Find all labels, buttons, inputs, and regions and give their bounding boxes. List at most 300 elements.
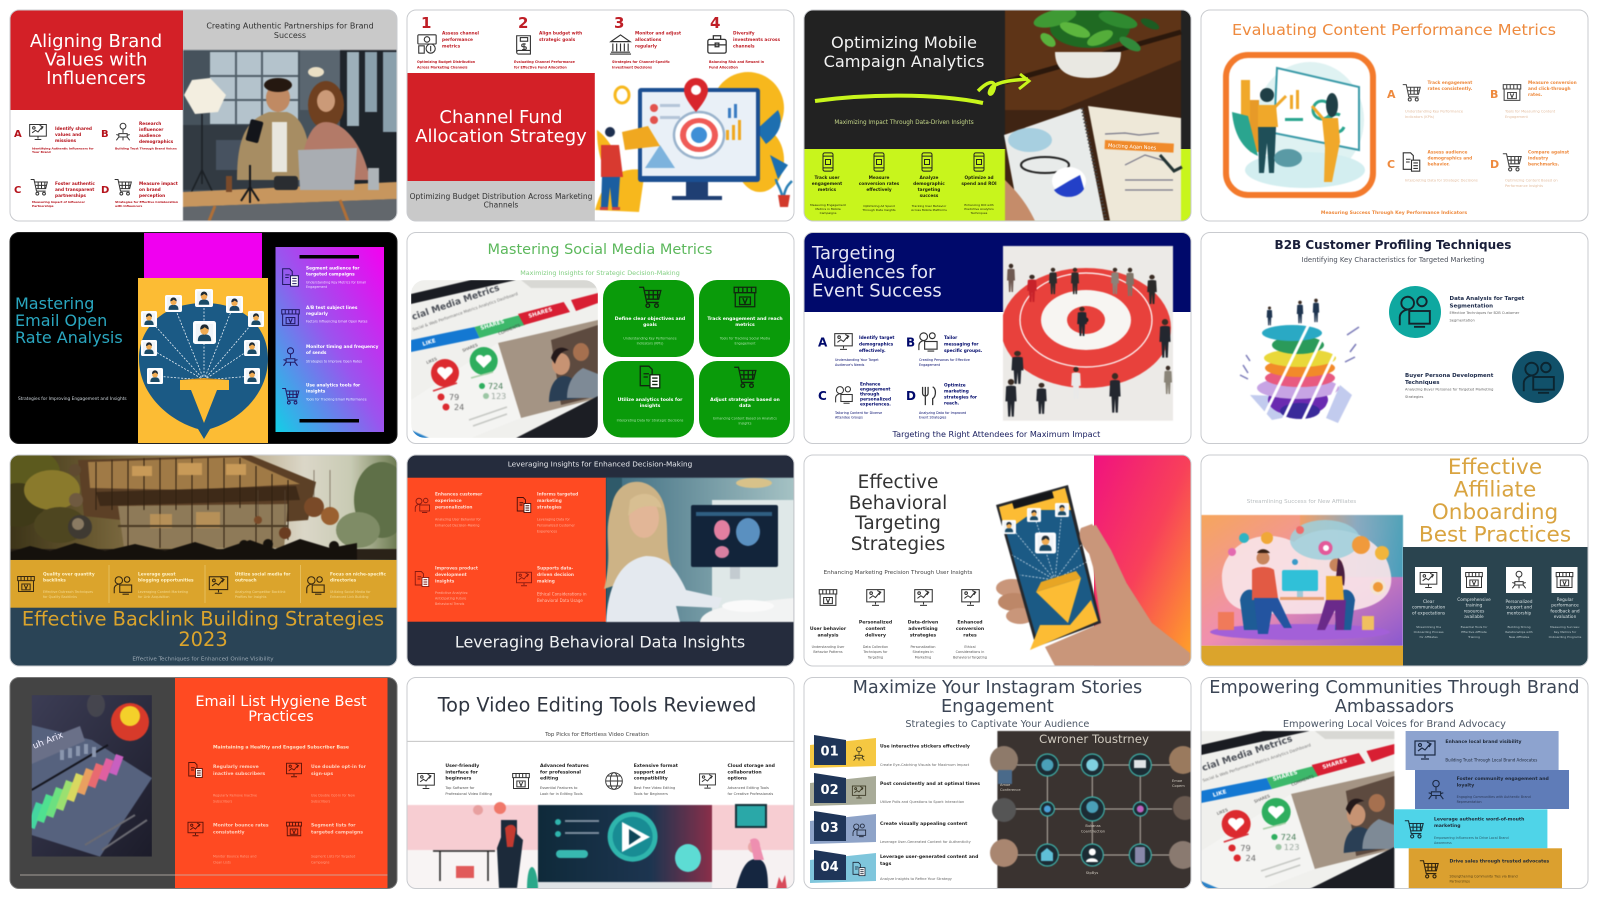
item: niche directories: Focus on niche-specific: [330, 572, 386, 578]
card: foster community engagement: Foster community engagement and: [1457, 776, 1549, 782]
heading: Practices: [248, 709, 314, 725]
photo caption and node labels: [1000, 732, 1185, 875]
item: data-driven advertising: Strategies in: [913, 650, 933, 654]
item: buyer persona development: Strategies: [1405, 395, 1423, 399]
item: regular performance feedback: Regular: [1557, 597, 1573, 603]
subtitle panel: grey band: Channels: [484, 200, 518, 210]
item: cloud storage: collaboration: [728, 770, 762, 776]
item: advanced features: Advanced features: [540, 763, 589, 769]
item A: [14, 124, 94, 154]
item C: personalized: [860, 396, 891, 402]
panel: Email List Hygiene Best Practices: [10, 678, 397, 888]
item: comprehensive training: resources: [1464, 609, 1485, 615]
card: track engagement: metrics: [735, 322, 755, 328]
item: measure conversion: [859, 153, 900, 212]
item: data analysis for target segmentation: Data Analysis for Target: [1450, 296, 1525, 302]
item 3: Strategies for Channel-Specific: [612, 60, 670, 64]
heading: Best Practices: [1419, 523, 1571, 548]
item: comprehensive training: Essential Tools for: [1461, 625, 1488, 629]
item: monitor timing: Monitor timing and frequency: [306, 344, 379, 350]
item: remove inactive subscribers: Regularly Remove Inactive: [213, 794, 257, 798]
item: segment audience: Understanding Key Metrics for Email: [306, 280, 366, 284]
item: monitor timing: Strategies to Improve Open Rates: [306, 360, 362, 364]
item C: C: [818, 389, 827, 403]
item: advanced features: Look for in Editing Tools: [540, 792, 583, 796]
item: cloud storage: options: [728, 776, 747, 782]
item C: Attendee Groups: [835, 416, 863, 420]
item: extensive format: Tools for Beginners: [633, 792, 668, 796]
card: define objectives: goals: [643, 322, 657, 328]
heading: [15, 294, 123, 347]
heading: Targeting: [854, 513, 941, 534]
item B: Creating Personas for Effective: [919, 358, 970, 362]
subtitle panel: grey band: [407, 181, 595, 221]
item: advanced features: Essential Features to: [540, 786, 577, 790]
item 2: strategic goals: [539, 37, 576, 43]
item: regular performance feedback: [1549, 567, 1582, 639]
item 1: [417, 14, 480, 70]
item C: behavior.: [1428, 162, 1450, 168]
item: analyze demographic: demographic: [913, 181, 945, 187]
stats band: four strategies: [10, 560, 397, 608]
item D: strategies for: [944, 394, 978, 400]
heading: Email List Hygiene Best: [195, 694, 367, 710]
item 1: 1: [421, 14, 431, 32]
orange panel: [407, 478, 606, 622]
item 03: Create visually appealing content: [880, 821, 968, 827]
item: measure conversion: conversion rates: [859, 181, 900, 187]
item D: D: [1490, 158, 1499, 171]
item: data-driven advertising: advertising: [908, 626, 938, 632]
item A: rates consistently.: [1428, 86, 1473, 92]
item B: rates.: [1528, 92, 1543, 98]
item B: [101, 121, 177, 150]
heading: Empowering Communities Through Brand: [1209, 678, 1580, 698]
item 2: 2: [518, 14, 528, 32]
item: clear communication: for Affiliates: [1420, 635, 1438, 639]
item B: B: [1490, 88, 1498, 101]
item: segment audience: [283, 266, 366, 289]
item: track user engagement: [810, 153, 847, 215]
item: social media: [209, 572, 291, 599]
item: monitor timing: of sends: [306, 350, 327, 356]
item: personalized support: Building Strong: [1507, 625, 1531, 629]
item: personalized content delivery: Targeting: [867, 656, 883, 660]
photo caption and node labels: Copem: [1172, 784, 1185, 788]
item A: [1387, 80, 1473, 119]
item: a/b test: A/B test subject lines: [306, 305, 358, 311]
item C: experiences.: [860, 402, 891, 408]
item: quality backlinks: for Quality Backlinks: [43, 595, 77, 599]
panel: Empowering Communities Through Brand Ambassadors: [1201, 678, 1588, 889]
item: enhances customer experience: personalization: [435, 505, 472, 511]
gradient strategy panel: [276, 247, 384, 432]
item C: Tailoring Content for Diverse: [834, 411, 882, 415]
item 3: regularly: [635, 44, 657, 50]
item 03: [810, 811, 972, 844]
item: personalized content delivery: Personalized: [859, 620, 892, 626]
top caption: Leveraging Insights for Enhanced Decision-Making: [508, 460, 692, 469]
item 01: [810, 735, 970, 768]
heading: Onboarding: [1432, 500, 1558, 525]
card: foster community engagement: [1415, 770, 1569, 809]
card: leverage word-of-mouth: marketing: [1434, 823, 1461, 829]
item: personalized content delivery: [859, 590, 892, 660]
card: track engagement: Engagement: [734, 342, 756, 346]
item C: Measuring Impact of Influencer: [32, 200, 85, 204]
item A: Audience's Needs: [835, 363, 865, 367]
item C: partnerships: [55, 193, 86, 199]
item 01: Use interactive stickers effectively: [880, 744, 970, 750]
heading panel: red title block: [10, 10, 183, 110]
subtitle panel: grey band: Optimizing Budget Distribution Across Marketing: [410, 192, 593, 201]
heading panel: red title block: Aligning Brand: [30, 31, 162, 52]
card: leverage word-of-mouth: Awareness: [1434, 841, 1452, 845]
illustration: hand holding phone with funnel: [996, 485, 1190, 666]
item: informs targeted marketing: Personalized Customer: [537, 524, 575, 528]
illustration: analysts at dashboard in orange frame: [1226, 55, 1373, 195]
item D: D: [906, 389, 916, 403]
item D: Analyzing Data for Improved: [919, 411, 966, 415]
item: double opt-in: Use double opt-in for: [311, 764, 367, 770]
heading block: 2023: [178, 628, 228, 651]
item: analyze demographic: targeting: [918, 187, 940, 193]
heading: Optimizing Mobile: [831, 33, 977, 52]
heading band: Targeting: [811, 243, 896, 264]
item: extensive format: compatibility: [634, 776, 668, 782]
item C: Assess audience: [1428, 150, 1467, 156]
item C: Interpreting Data for Strategic Decisions: [1405, 178, 1478, 182]
card: utilize analytics: [603, 361, 694, 438]
item: supports data-driven decisions: [516, 566, 587, 603]
heading: Mastering Social Media Metrics: [488, 242, 712, 258]
item D: Event Strategies: [919, 416, 947, 420]
heading: [853, 678, 1142, 717]
subtitle: Maximizing Impact Through Data-Driven Insights: [834, 120, 974, 126]
heading band: Event Success: [812, 281, 942, 302]
illustration: marketer and target on monitor: [595, 72, 794, 221]
item: clear communication: [1412, 567, 1446, 639]
card: adjust strategies: [699, 361, 790, 438]
heading: Top Video Editing Tools Reviewed: [437, 694, 756, 717]
item: monitor bounce rates: Monitor Bounce Rates and: [213, 855, 256, 859]
item: clear communication: Clear: [1423, 599, 1434, 605]
item 03: 03: [821, 821, 839, 836]
item: enhanced conversion rates: rates: [963, 632, 977, 638]
item D: Strategies for Effective Collaboration: [115, 200, 178, 204]
heading: [849, 472, 947, 555]
item A: A: [818, 336, 828, 350]
card: define objectives: Define clear objectives and: [615, 316, 685, 322]
item: measure conversion: Through Data Insights: [861, 208, 896, 212]
item A: missions: [55, 138, 77, 144]
panel: Effective Affiliate Onboarding Best Practices: [1201, 455, 1588, 666]
heading: Strategies: [851, 534, 945, 555]
item D: [906, 382, 978, 420]
item 1: metrics: [442, 44, 461, 50]
item B: audience: [139, 133, 161, 139]
photo: glass building in misty forest: [0, 448, 410, 561]
item: use analytics tools: Use analytics tools for: [306, 382, 361, 388]
item: analyze demographic: Across Mobile Platforms: [911, 208, 947, 212]
subtitle: Streamlining Success for New Affiliates: [1247, 499, 1356, 505]
item: enhances customer experience: Enhances customer: [435, 492, 483, 498]
item 04: Leverage user-generated content and: [880, 854, 978, 860]
item: segment audience: Engagement: [306, 285, 328, 289]
subtitle: Maintaining a Healthy and Engaged Subscriber Base: [213, 745, 349, 751]
item: use analytics tools: [282, 382, 367, 404]
item: personalized content delivery: content: [866, 626, 886, 632]
card: define objectives: Indicators (KPIs): [637, 342, 663, 346]
item: data-driven advertising: Personalization: [910, 645, 936, 649]
heading: Effective: [858, 472, 938, 493]
subtitle: Effective Techniques for Enhanced Online Visibility: [132, 657, 274, 663]
item 02: 02: [821, 783, 839, 798]
heading band: Audiences for: [812, 262, 936, 283]
item A: effectively.: [859, 348, 886, 354]
item: informs targeted marketing: Experiences: [537, 530, 557, 534]
item: user-friendly: beginners: [445, 776, 472, 782]
card: define objectives: Understanding Key Performance: [623, 336, 677, 340]
item C: through: [860, 392, 879, 398]
item: extensive format: [606, 763, 679, 796]
item 02: [810, 773, 980, 806]
item: optimize ad spend: Predictive Analytics: [964, 207, 994, 211]
item: track user engagement: metrics: [818, 187, 837, 193]
panel: Evaluating Content Performance Metrics: [1201, 10, 1588, 221]
item D: benchmarks.: [1528, 162, 1560, 168]
item D: on brand: [139, 187, 161, 193]
heading panel: red title block: Allocation Strategy: [415, 126, 587, 147]
item: data analysis for target segmentation: Effective Techniques for B2B Customer: [1450, 311, 1520, 315]
item: supports data-driven decisions: Ethical Considerations in: [537, 592, 587, 596]
item: personalized support: mentorship: [1507, 610, 1532, 616]
item: measure conversion: effectively: [866, 187, 892, 193]
card: track engagement: [699, 280, 790, 357]
card: enhance local brand visibility: Enhance local brand visibility: [1445, 739, 1522, 745]
item 1: performance: [442, 37, 473, 43]
item: buyer persona development: Analyzing Buyer Personas for Targeted Marketing: [1405, 388, 1493, 392]
panel: Effective Backlink Building Strategies 2023: [0, 448, 410, 666]
illustration: layered rainbow funnel: [1240, 299, 1359, 423]
item: monitor bounce rates: consistently: [213, 830, 245, 836]
heading panel: red title block: [407, 73, 595, 181]
item: guest blogging: for Link Acquisition: [138, 595, 169, 599]
item B: Measure conversion: [1528, 80, 1577, 86]
item: informs targeted marketing: Leveraging Data for: [537, 518, 570, 522]
item: regular performance feedback: Measuring Success:: [1550, 625, 1580, 629]
item: measure conversion: Optimizing Ad Spend: [863, 204, 895, 208]
item: personalized content delivery: Data Collection: [863, 645, 888, 649]
footer caption: Measuring Success Through Key Performance Indicators: [1321, 210, 1467, 216]
gold base: [1201, 646, 1403, 666]
photo caption and node labels: Amoe: [1000, 783, 1011, 787]
item B: messaging for: [944, 342, 979, 348]
dark panel: [1403, 547, 1588, 666]
item: segment audience: targeted campaigns: [306, 272, 355, 278]
item: analyze demographic: [911, 153, 947, 212]
item 02: Utilize Polls and Questions to Spark Interaction: [880, 800, 964, 804]
item: advanced features: [513, 763, 589, 796]
item: double opt-in: sign-ups: [311, 771, 333, 777]
item 02: Post consistently and at optimal times: [880, 781, 980, 787]
item: comprehensive training: Training: [1467, 635, 1480, 639]
item: comprehensive training: training: [1466, 603, 1483, 609]
photo caption and node labels: Cwroner Toustrney: [1039, 732, 1149, 746]
heading: [824, 33, 984, 71]
item: enhanced conversion rates: [953, 590, 987, 660]
item C: [1387, 150, 1478, 182]
item: extensive format: support and: [634, 770, 665, 776]
item A: Track engagement: [1428, 80, 1472, 86]
item A: Indicators (KPIs): [1405, 115, 1435, 119]
item 1: Assess channel: [442, 30, 480, 36]
item: optimize ad spend: Techniques: [970, 211, 988, 215]
screen label inside photo: uh Arix: [31, 730, 65, 752]
item 4: [708, 14, 780, 70]
panel: Leveraging Behavioral Data Insights: [407, 455, 794, 666]
item 2: for Effective Fund Allocation: [514, 66, 567, 70]
card: adjust strategies: Insights: [739, 422, 752, 426]
item: regular performance feedback: performance: [1551, 603, 1579, 609]
subtitle panel: grey band: Success: [274, 31, 306, 40]
card: foster community engagement: Representation: [1457, 800, 1482, 804]
photo: network diagram on dark wood: [990, 731, 1197, 889]
item 4: Fund Allocation: [709, 66, 739, 70]
item: comprehensive training: available: [1464, 614, 1484, 620]
item 4: Diversify: [733, 30, 755, 36]
illustration: two people at laptop with icons: [1201, 515, 1403, 646]
photo caption and node labels: Coantriection: [1081, 830, 1105, 834]
item: segment lists: Segment lists for: [311, 823, 356, 829]
item C: [14, 180, 95, 208]
item: cloud storage: Advanced Editing Tools: [728, 786, 769, 790]
item: remove inactive subscribers: Regularly remove: [213, 764, 259, 770]
heading: Campaign Analytics: [824, 52, 984, 71]
card: adjust strategies: data: [739, 403, 751, 409]
item D: reach.: [944, 400, 960, 406]
item: quality backlinks: backlinks: [43, 578, 66, 584]
heading panel: red title block: Channel Fund: [439, 107, 563, 128]
item: analyze demographic: Analyze: [920, 175, 939, 181]
item: a/b test: [282, 305, 368, 325]
item 03: Leverage User-Generated Content for Authenticity: [880, 840, 972, 844]
photo caption and node labels: Emoe: [1172, 779, 1183, 783]
item B: demographics: [139, 139, 174, 145]
item: informs targeted marketing: [517, 492, 578, 534]
item: regular performance feedback: Onboarding Programs: [1549, 635, 1582, 639]
item: niche directories: Enhanced Link Building: [330, 595, 369, 599]
item 3: [610, 14, 681, 70]
item B: influencer: [139, 127, 164, 133]
item: comprehensive training: Effective Affiliate: [1461, 630, 1487, 634]
card: leverage word-of-mouth: Leverage authentic word-of-mouth: [1434, 817, 1524, 823]
item: improves product development: Improves product: [435, 566, 478, 572]
card: foster community engagement: loyalty: [1457, 783, 1474, 789]
heading band: [804, 232, 1191, 312]
heading panel: red title block: Values with: [45, 50, 147, 70]
item D: industry: [1528, 156, 1548, 162]
item: user behavior analysis: User behavior: [810, 626, 847, 632]
item: data-driven advertising: strategies: [910, 632, 936, 638]
photo caption and node labels: Conference: [1000, 788, 1021, 792]
item: enhances customer experience: [415, 492, 483, 528]
item: buyer persona development: Techniques: [1405, 380, 1440, 386]
item A: A: [1387, 88, 1396, 101]
item: enhanced conversion rates: Ethical: [964, 645, 976, 649]
item: analyze demographic: success: [920, 194, 939, 199]
photo caption and node labels: Bukanas: [1085, 824, 1101, 828]
card: adjust strategies: Enhancing Content Based on Analytics: [713, 416, 777, 420]
subtitle: Enhancing Marketing Precision Through User Insights: [824, 570, 973, 576]
item: personalized content delivery: Techniques for: [863, 650, 888, 654]
item: data analysis for target segmentation: Segmentation: [1450, 304, 1493, 310]
item 04: Analyze Insights to Refine Your Strategy: [880, 877, 953, 881]
item: segment lists: Segment Lists for Targeted: [311, 855, 355, 859]
item: supports data-driven decisions: Behavioral Data Usage: [537, 598, 583, 603]
item A: Identify shared: [55, 126, 92, 132]
item: segment lists: [286, 822, 363, 864]
item C: demographics and: [1428, 156, 1472, 162]
item: optimize ad spend: Enhancing ROI with: [964, 203, 994, 207]
item D: [1490, 150, 1569, 188]
item: remove inactive subscribers: inactive subscribers: [213, 771, 265, 777]
item: use analytics tools: Tools for Tracking Email Performance: [305, 398, 367, 402]
item: monitor timing: [284, 344, 379, 366]
item: enhances customer experience: Analyzing User Behavior for: [435, 518, 482, 522]
item: enhances customer experience: Enhanced Decision-Making: [435, 524, 479, 528]
card: leverage word-of-mouth: [1394, 809, 1547, 848]
heading: Evaluating Content Performance Metrics: [1232, 21, 1556, 39]
item B: Building Trust Through Brand Voices: [115, 146, 177, 150]
item: monitor bounce rates: Clean Lists: [213, 860, 231, 864]
card: track engagement: Track engagement and reach: [707, 316, 783, 322]
item 3: Investment Decisions: [612, 66, 652, 70]
subtitle: Strategies for Improving Engagement and Insights: [18, 396, 127, 402]
item: remove inactive subscribers: [189, 762, 265, 804]
item: supports data-driven decisions: Supports data-: [537, 566, 573, 572]
item 1: Across Marketing Channels: [417, 66, 468, 70]
panel: Maximize Your Instagram Stories Engagement: [804, 678, 1197, 889]
item: guest blogging: Leverage guest: [138, 572, 176, 578]
item: user-friendly: User-friendly: [445, 763, 479, 769]
item D: Optimizing Content Based on: [1505, 178, 1558, 182]
item: user behavior analysis: analysis: [817, 632, 839, 638]
photo: social media dashboard: [1201, 731, 1394, 889]
card: drive sales through advocates: Drive sales through trusted advocates: [1450, 859, 1549, 865]
item: monitor bounce rates: [188, 822, 269, 864]
item: segment lists: targeted campaigns: [311, 830, 363, 836]
item: cloud storage: [700, 763, 775, 796]
item: supports data-driven decisions: driven decision: [537, 572, 574, 578]
heading: [1419, 455, 1571, 548]
item: data-driven advertising: Data-driven: [908, 620, 938, 626]
item: track user engagement: engagement: [812, 181, 842, 187]
item: informs targeted marketing: Informs targeted: [537, 492, 578, 498]
item: use analytics tools: insights: [306, 388, 326, 394]
item: buyer persona development: Buyer Persona Development: [1405, 373, 1494, 379]
brush stroke arrow: [815, 74, 1029, 103]
item A: [818, 334, 894, 367]
item A: A: [14, 129, 22, 140]
item: user behavior analysis: Understanding User: [812, 645, 845, 649]
subtitle panel: grey band: [183, 10, 397, 50]
gradient block: [1094, 455, 1191, 666]
item 3: allocations: [635, 37, 662, 43]
item C: and transparent: [55, 187, 94, 193]
card: drive sales through advocates: Strengthening Community Ties via Brand: [1450, 875, 1518, 879]
item 01: 01: [821, 745, 839, 760]
